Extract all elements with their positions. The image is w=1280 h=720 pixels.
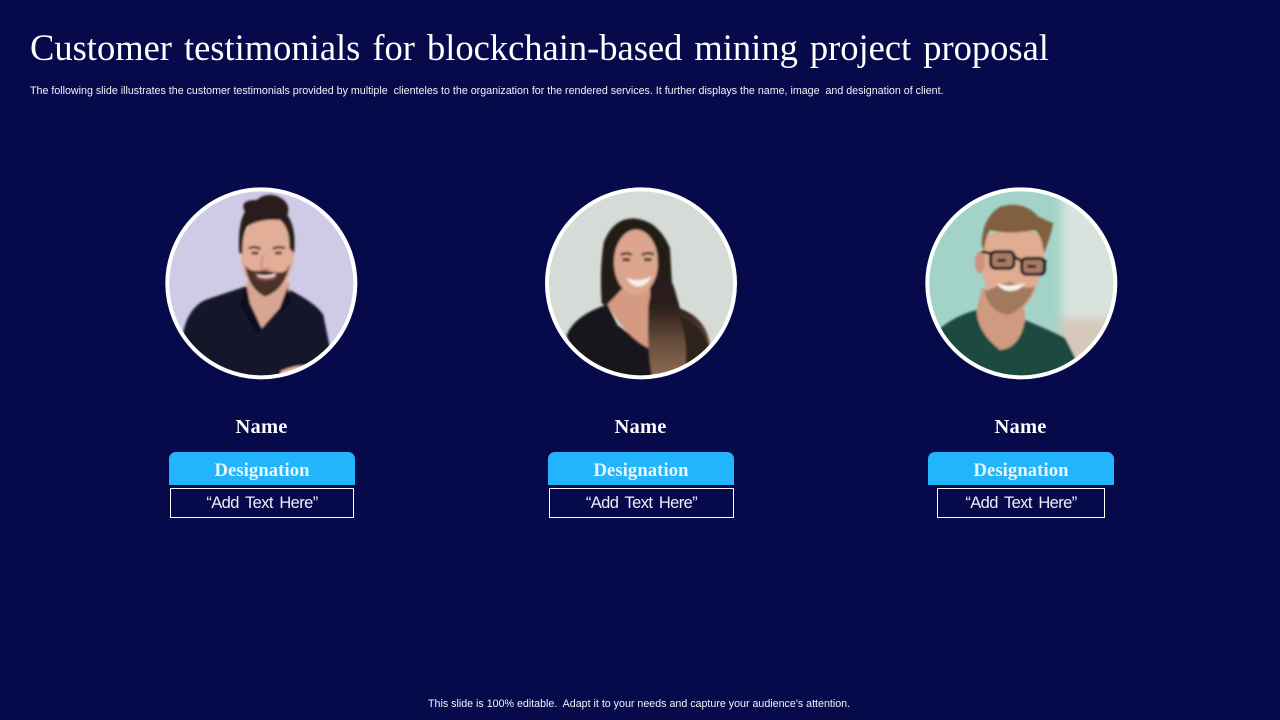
quote box 1 <box>170 488 354 518</box>
designation tab 2 <box>548 452 734 485</box>
title: Customer testimonials for blockchain-based mining project proposal <box>30 27 1049 68</box>
portrait: man with glasses <box>925 187 1118 380</box>
designation tab 3: Designation <box>973 460 1069 481</box>
quote box 3 <box>937 488 1105 518</box>
portrait: woman with long hair <box>545 187 737 380</box>
quote box 3: “Add Text Here” <box>965 494 1077 512</box>
subtitle description: The following slide illustrates the customer testimonials provided by multiple clienteles to the organization for the rendered services. It further displays the name, image and designation of client. <box>30 85 944 97</box>
designation tab 1: Designation <box>214 460 310 481</box>
quote box 2 <box>549 488 734 518</box>
footer note: This slide is 100% editable. Adapt it to your needs and capture your audience's attention. <box>428 698 850 710</box>
name label 1: Name <box>235 416 288 438</box>
name label 2: Name <box>614 416 667 438</box>
designation tab 1 <box>169 452 355 485</box>
quote box 2: “Add Text Here” <box>586 494 697 512</box>
designation tab 2: Designation <box>593 460 689 481</box>
name label 3: Name <box>994 416 1047 438</box>
quote box 1: “Add Text Here” <box>206 494 318 512</box>
portrait: man with dark shirt <box>165 187 358 380</box>
designation tab 3 <box>928 452 1114 485</box>
